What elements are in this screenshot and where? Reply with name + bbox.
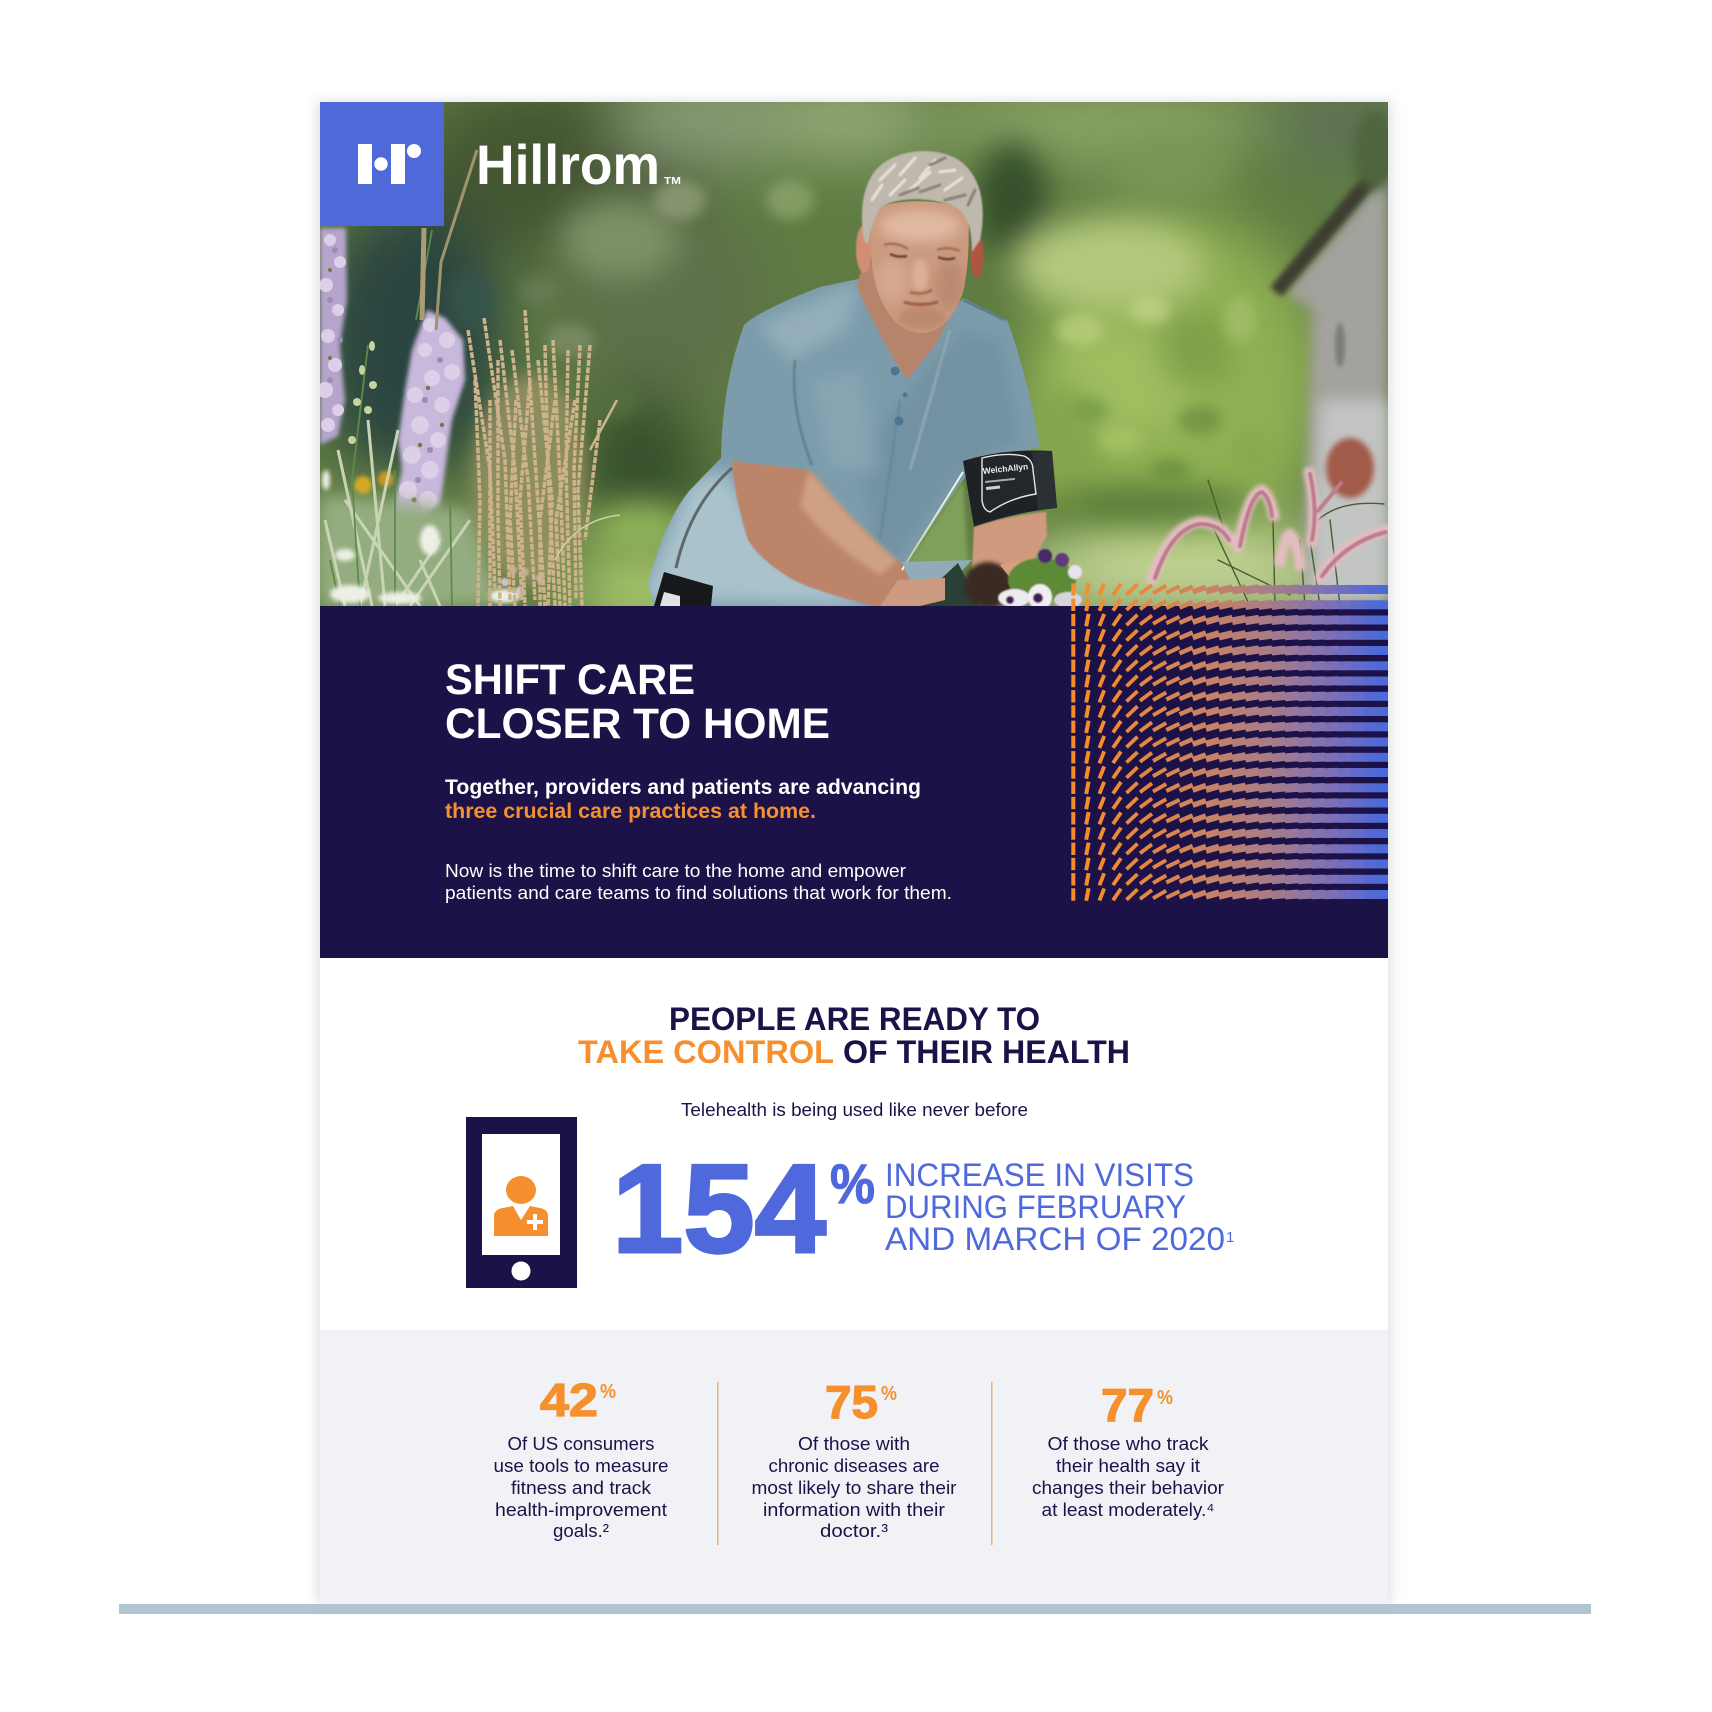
neck and head xyxy=(856,151,984,380)
purple delphinium spikes xyxy=(317,228,465,520)
blurred garden background xyxy=(320,102,1388,606)
title: SHIFT CARE xyxy=(445,656,695,704)
barn wall and roof xyxy=(1276,110,1397,600)
intro paragraph: Now is the time to shift care to the home and empower xyxy=(445,860,906,881)
Hillrom wordmark: Hillrom xyxy=(476,133,660,196)
big stat: 154%: 154 xyxy=(612,1138,826,1279)
facial features xyxy=(884,244,960,304)
section heading: PEOPLE ARE READY TO xyxy=(669,1001,1040,1037)
stat: 75%: 75 xyxy=(825,1376,878,1428)
stat: 77%: at least moderately.⁴ xyxy=(1042,1499,1215,1520)
blood pressure cuff xyxy=(963,450,1057,527)
subtitle xyxy=(445,776,921,823)
man's left forearm xyxy=(732,460,910,606)
section heading xyxy=(578,1001,1130,1070)
hair xyxy=(862,151,983,252)
Hillrom wordmark: TM xyxy=(664,176,681,187)
plant pot and soil xyxy=(880,562,1040,608)
stat description: 1 xyxy=(1226,1229,1234,1246)
stat: 75%: chronic diseases are xyxy=(768,1455,940,1476)
icon: Hillrom monogram xyxy=(358,144,421,184)
jeans xyxy=(902,560,972,580)
stat description: DURING FEBRUARY xyxy=(885,1189,1186,1225)
title: CLOSER TO HOME xyxy=(445,700,830,748)
pink fountain grass plumes xyxy=(1152,472,1388,606)
stat: 77%: Of those who track xyxy=(1048,1433,1209,1454)
foreground leaves and white blossoms xyxy=(320,230,544,606)
stat: 75%: % xyxy=(881,1383,897,1405)
telehealth subheading: Telehealth is being used like never before xyxy=(681,1099,1028,1120)
section heading: TAKE CONTROL xyxy=(578,1034,834,1070)
page drop shadow xyxy=(316,100,1392,1604)
upper arm and hand xyxy=(972,512,1047,570)
section heading: OF THEIR HEALTH xyxy=(843,1034,1130,1070)
stat: 75%: most likely to share their xyxy=(752,1477,956,1498)
panel: logo square xyxy=(320,102,444,226)
stat: 42%: Of US consumers xyxy=(508,1433,654,1454)
tan feather reed grass xyxy=(422,150,620,606)
blood pressure cuff: WelchAllyn xyxy=(982,461,1029,476)
stat description xyxy=(885,1157,1234,1257)
stat: 75% xyxy=(752,1376,956,1541)
stat: 75%: doctor.³ xyxy=(820,1520,888,1541)
panel: hero photograph xyxy=(320,102,1388,606)
big stat: 154%: % xyxy=(830,1152,875,1215)
stat: 42% xyxy=(494,1374,668,1541)
stat: 42%: % xyxy=(600,1381,616,1403)
stat: 75%: information with their xyxy=(763,1499,945,1520)
man's torso and shirt xyxy=(640,270,1050,610)
intro paragraph xyxy=(445,860,952,903)
icon: phone with clinician xyxy=(466,1117,577,1288)
stat: 42%: fitness and track xyxy=(511,1477,652,1498)
stat description: INCREASE IN VISITS xyxy=(885,1157,1194,1193)
panel: statistics band xyxy=(320,1330,1388,1604)
panel: navy intro band xyxy=(320,606,1388,958)
panel: telehealth section xyxy=(320,958,1388,1330)
leafy texture and bokeh xyxy=(446,180,1268,482)
stat: 77%: their health say it xyxy=(1056,1455,1200,1476)
cuff hose xyxy=(676,468,732,568)
stat: 75%: Of those with xyxy=(798,1433,910,1454)
ground bar xyxy=(119,1604,1591,1614)
stat: 77%: % xyxy=(1157,1387,1173,1409)
monitor device at belt xyxy=(654,572,713,606)
stat: 42%: health-improvement xyxy=(495,1499,667,1520)
stat: 77%: 77 xyxy=(1101,1379,1154,1431)
dividers xyxy=(717,1382,992,1545)
pansies xyxy=(998,549,1082,610)
stat: 42%: 42 xyxy=(540,1374,598,1426)
yellow background flowers xyxy=(354,476,372,494)
intro paragraph: patients and care teams to find solutions that work for them. xyxy=(445,882,952,903)
decorative halftone line pattern xyxy=(1073,583,1388,901)
subtitle: three crucial care practices at home. xyxy=(445,800,816,823)
stat: 42%: use tools to measure xyxy=(494,1455,668,1476)
subtitle: Together, providers and patients are advancing xyxy=(445,776,921,799)
title xyxy=(445,656,830,748)
stat: 77%: changes their behavior xyxy=(1032,1477,1224,1498)
stat: 77% xyxy=(1032,1379,1224,1520)
stat description: AND MARCH OF 2020 xyxy=(885,1221,1225,1257)
stat: 42%: goals.² xyxy=(553,1520,609,1541)
